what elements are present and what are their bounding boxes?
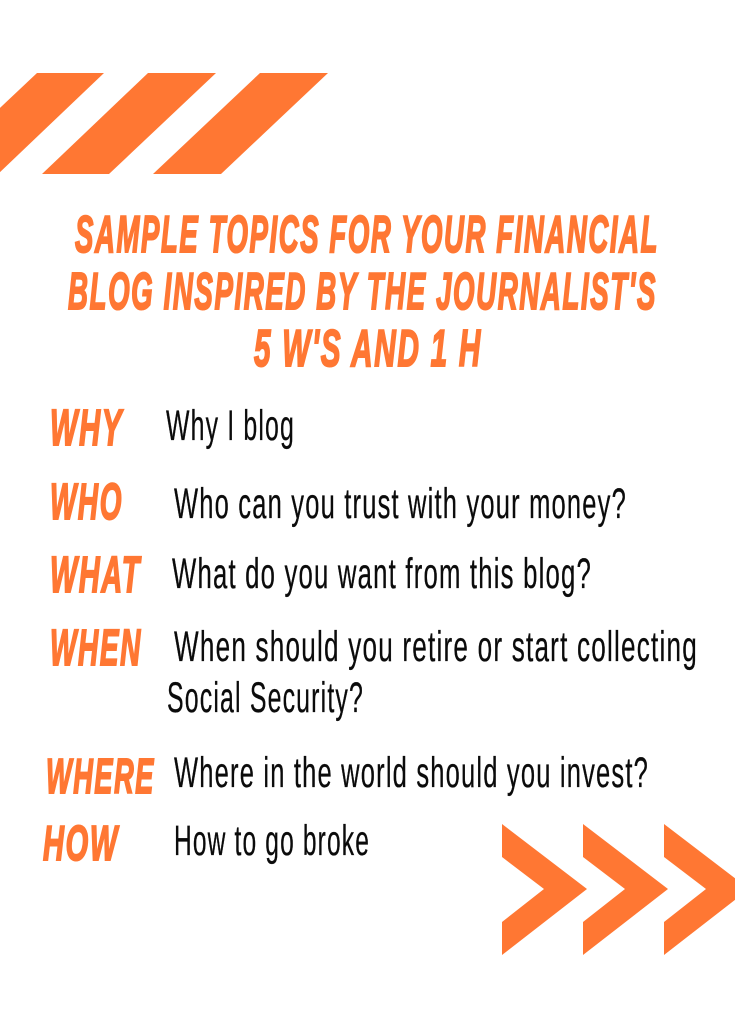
row: who	[50, 473, 627, 530]
row: how: How to go broke	[174, 817, 370, 865]
row: why: Why I blog	[166, 402, 295, 450]
row: why	[50, 399, 295, 456]
row: where	[46, 749, 649, 804]
row: when	[50, 619, 698, 722]
row: how	[43, 817, 370, 871]
chevron arrows	[502, 824, 735, 955]
row: when: WHEN	[50, 619, 142, 676]
row: why: WHY	[50, 399, 124, 456]
row: what: WHAT	[50, 546, 141, 603]
row: where: WHERE	[46, 750, 155, 804]
title	[68, 206, 659, 378]
row: what	[50, 546, 592, 603]
diagonal stripes	[0, 73, 328, 174]
title: 5 W'S AND 1 H	[254, 320, 482, 378]
row: how: HOW	[43, 817, 119, 871]
row: when: Social Security?	[167, 674, 364, 722]
row: who: WHO	[50, 473, 123, 530]
